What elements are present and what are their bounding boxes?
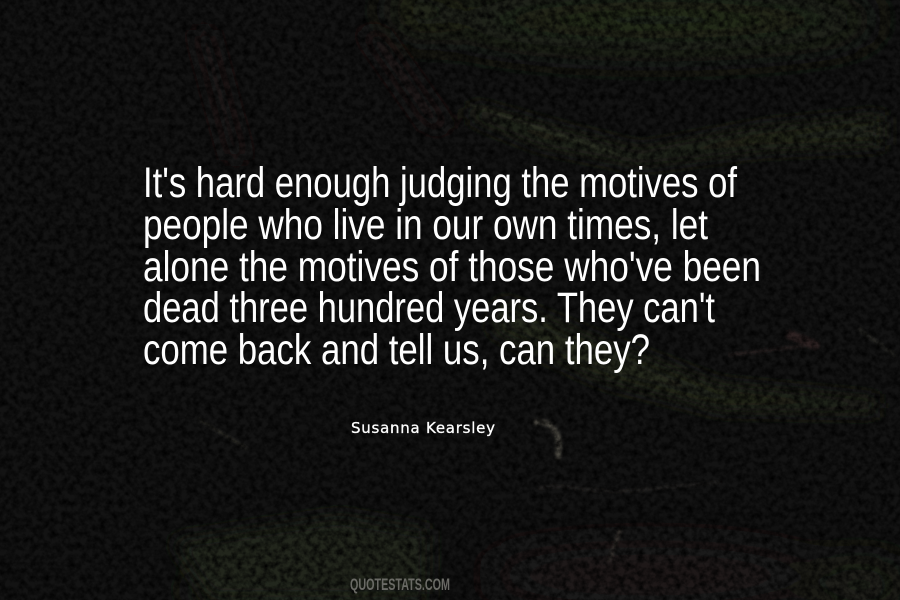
quote text: people who live in our own times, let	[143, 201, 708, 249]
quote text: It's hard enough judging the motives of	[143, 159, 738, 207]
author name: Susanna Kearsley	[351, 419, 495, 437]
watermark: QUOTESTATS.COM	[350, 575, 450, 594]
quote text: alone the motives of those who've been	[143, 243, 761, 291]
quote text: come back and tell us, can they?	[143, 326, 650, 374]
quote text: dead three hundred years. They can't	[143, 284, 715, 332]
quote text	[143, 159, 761, 374]
